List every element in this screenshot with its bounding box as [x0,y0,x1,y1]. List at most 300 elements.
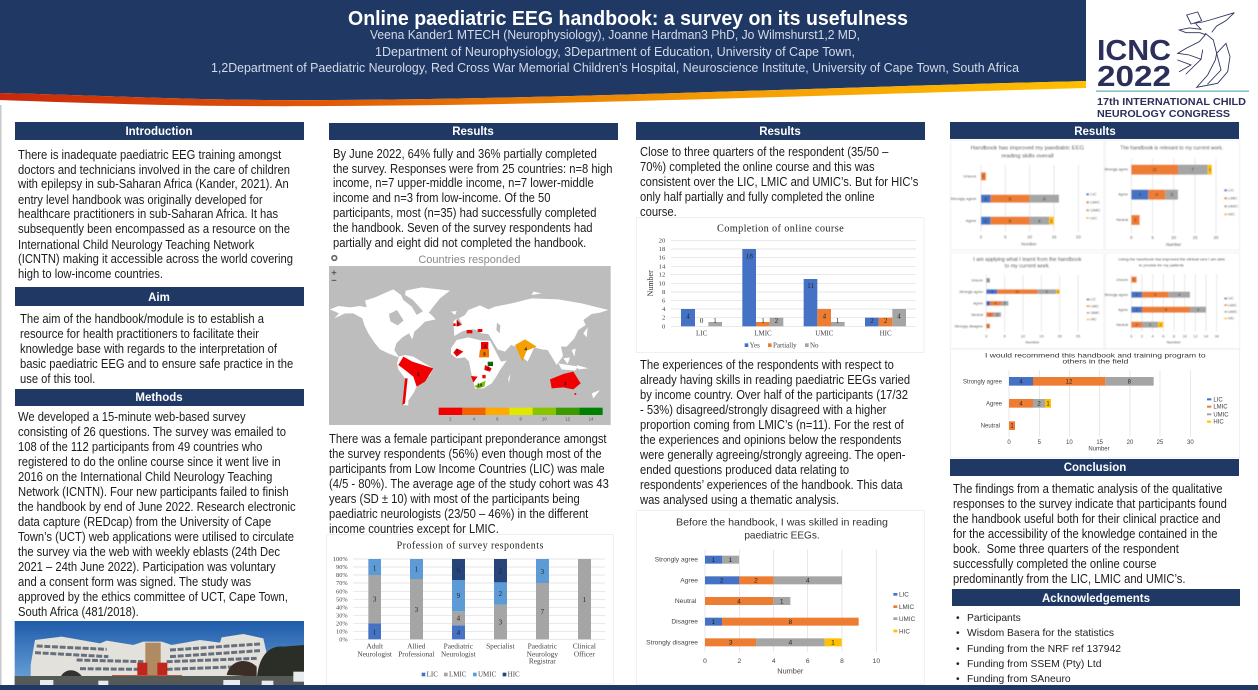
text: conclusion body: for the accessibility of the knowledge contained in the [953,526,1218,541]
chart: applying what was learnt: 2 [1004,302,1006,306]
heading: introduction: Introduction [125,126,193,138]
chart: applying what was learnt: Strongly disagree [955,324,983,328]
chart: applying what was learnt: 10 [1021,333,1026,338]
text: introduction body: with epilepsy in sub-Saharan Africa (Kander, 2021). An [17,176,289,191]
chart: applying what was learnt: Agree [973,302,983,306]
stacked bars [705,556,859,646]
legend: LMIC [899,604,915,611]
chart: applying what was learnt: 20 [1057,333,1063,338]
heading: results [329,123,618,140]
authors and affiliations: 1,2Department of Paediatric Neurology, Red Cross War Memorial Children’s Hospital, Neuroscience Institute, University of Cape Town, South Africa [211,61,1019,75]
logo: ICNC 2022: 2022 [1097,61,1171,93]
chart: improved reading skills: 2 [984,196,987,201]
chart: skilled before the handbook: Agree [680,577,698,584]
chart: improved clinical care: LIC [1228,297,1234,301]
chart: profession of survey respondents: 90% [336,564,348,571]
list: acknowledgements: • [956,628,960,639]
chart: applying what was learnt: 5 [1046,290,1048,294]
chart: skilled before the handbook: 8 [840,658,844,665]
text: prior skills and thematic analysis: respondents’ experiences of the handbook. This data [640,477,903,492]
text: methods body: the handbook by end of June 2022. Research electronic [18,499,296,514]
text: results overview: partially and eight did not completed the handbook. [333,235,586,250]
text: results overview: participants, most (n=35) had successfully completed [333,205,597,220]
chart title: Before the handbook, I was skilled in reading [676,517,888,528]
text: prior skills and thematic analysis: was analysed using a thematic analysis. [639,492,839,507]
logo: ICNC 2022 [1096,12,1249,120]
stacked bars [368,559,591,639]
text: prior skills and thematic analysis: The experiences of the respondents with respect to [640,357,894,372]
chart: improved clinical care: UMIC [1228,310,1238,314]
chart: skilled before the handbook: 3 [729,640,733,647]
chart: recommend to others: Neutral [981,424,1000,430]
chart: improved reading skills: 8 [1009,196,1012,201]
chart: improved clinical care: Number [1167,340,1181,345]
chart: applying what was learnt: 1 [987,324,989,328]
chart: skilled before the handbook: 1 [780,598,784,605]
heading: conclusion: Conclusion [1064,462,1126,474]
title: Online paediatric EEG handbook: a survey on its usefulness [348,8,908,30]
map legend: 6 [496,416,499,421]
chart: completion of online course: 11 [807,282,815,290]
legend: Yes [750,341,760,349]
text: course completion: course. [640,204,677,219]
chart: improved clinical care: 12 [1193,333,1198,338]
panel: conclusion [950,459,1239,586]
chart: applying what was learnt: Number [1025,340,1040,345]
chart: applying what was learnt: 15 [1039,333,1044,338]
chart: relevant to current work: 15 [1193,235,1198,240]
y axis label: Number [646,270,655,296]
map values: 3 [483,352,486,357]
panel: aim [15,287,304,386]
list: acknowledgements: • [956,674,960,685]
chart: completion of online course: HIC [880,330,892,338]
chart: relevant to current work: LIC [1228,188,1234,193]
chart: improved clinical care: Unsure [1116,278,1128,282]
chart: profession of survey respondents: Paediatric [444,642,474,651]
chart: relevant to current work: 10 [1171,235,1177,240]
legend: No [810,341,819,349]
chart: relevant to current work: 2 [1134,217,1137,222]
chart: improved clinical care: 4 [1152,333,1155,338]
text: introduction body: (ICNTN) making it accessible across the world covering [18,251,293,266]
chart: improved clinical care: Agree [1118,308,1128,312]
chart: recommend to others: LMIC [1213,405,1228,411]
chart: applying what was learnt: 5 [1004,333,1007,338]
chart: completion of online course [636,218,924,353]
chart: profession of survey respondents: 3 [541,568,545,576]
chart: profession of survey respondents: Neurologist [357,649,392,658]
chart: applying what was learnt: I am applying what I learnt from the handbook [973,257,1082,263]
chart: recommend to others: UMIC [1213,412,1229,418]
chart: profession of survey respondents [326,535,613,684]
chart: applying what was learnt: LIC [1090,298,1096,302]
legend: HIC [508,671,520,679]
panel: introduction [15,122,304,281]
chart: profession of survey respondents: 100% [333,556,348,563]
heading: results [950,122,1239,139]
text: methods body: South Africa (481/2018). [18,604,139,619]
chart: recommend to others: 2 [1037,401,1041,407]
chart: recommend to others: 4 [1019,379,1023,385]
legend: Partially [773,341,797,349]
chart: profession of survey respondents: Neurologist [441,649,476,658]
list: acknowledgements [956,613,1121,685]
chart: profession of survey respondents: 20% [336,620,348,627]
chart: skilled before the handbook: 2 [754,578,758,585]
text: introduction body: doctors and technicians involved in the care of children [18,162,290,177]
chart: improved reading skills: Handbook has improved my paediatric EEG [971,145,1084,151]
chart: skilled before the handbook: Neutral [675,598,697,605]
chart: skilled before the handbook: 2 [737,658,741,665]
chart: improved reading skills: 1 [1050,218,1053,223]
chart: improved reading skills: 4 [1038,218,1041,223]
text: methods body: Town’s (UCT) web applications were utilised to circulate [18,529,294,544]
chart: completion of online course: LIC [696,330,708,338]
chart: profession of survey respondents: Officer [574,649,595,658]
chart: skilled before the handbook: 4 [772,658,776,665]
text: introduction body: high to low-income countries. [18,266,163,281]
text: course completion: consistent over the LIC, LMIC and UMIC’s. But for HIC’s [640,174,918,189]
chart: relevant to current work: 1 [1209,167,1212,172]
chart: applying what was learnt: 25 [1076,333,1081,338]
chart: profession of survey respondents: 1 [373,564,377,572]
legend: LIC [427,671,438,679]
chart: recommend to others: Number [1088,446,1110,452]
chart: completion of online course: 6 [662,298,666,305]
chart: improved clinical care: 10 [1182,333,1188,338]
chart: completion of online course: 0 [662,323,666,330]
chart: improved clinical care: 2 [1136,308,1138,312]
chart: recommend to others: HIC [1213,420,1224,426]
chart: improved clinical care: LMIC [1228,303,1237,307]
chart: improved reading skills: LIC [1090,192,1097,197]
chart: improved reading skills: UMIC [1090,208,1101,213]
heading: aim [15,287,304,306]
legend [745,341,819,349]
chart: completion of online course: 8 [662,289,666,296]
map legend [439,408,603,421]
map legend: 4 [473,416,476,421]
chart: improved clinical care [1104,253,1240,349]
chart: profession of survey respondents: Neurology [527,649,558,658]
text: methods body: Network (ICNTN). Four new participants failed to finish [18,484,289,499]
chart: applying what was learnt: Strongly agree [959,290,983,294]
text: conclusion body: book. Some three quarters of the respondent [953,541,1180,556]
text: course completion: Close to three quarters of the respondent (35/50 – [640,144,889,159]
map: countries responded [329,254,611,425]
chart: recommend to others: Agree [986,401,1003,407]
chart: profession of survey respondents: Paediatric [528,642,558,651]
heading: acknowledgements: Acknowledgements [1042,593,1150,605]
list: acknowledgements: Participants [967,613,1021,624]
chart: applying what was learnt: 2 [989,313,991,317]
map values: 2 [487,365,490,370]
logo: ICNC 2022: ICNC [1097,35,1171,67]
chart: relevant to current work: 4 [1138,192,1141,197]
chart: improved reading skills: 2 [984,218,987,223]
heading: results: Results [452,126,494,138]
chart: recommend to others: 15 [1096,440,1104,446]
chart: profession of survey respondents: 2 [499,567,503,575]
text: prior skills and thematic analysis [639,357,910,507]
chart: recommend to others: 0 [1007,440,1011,446]
map legend: 12 [565,416,571,421]
panel: results column 2 [326,123,618,684]
panel: acknowledgements [952,589,1240,685]
chart: improved reading skills: Number [1021,242,1037,247]
highlighted countries [398,319,581,405]
chart: relevant to current work: LMIC [1228,196,1238,201]
chart: relevant to current work: 5 [1151,235,1154,240]
chart: improved clinical care: 2 [1136,293,1138,297]
chart: improved reading skills: 6 [1043,196,1046,201]
logo: ICNC 2022: NEUROLOGY CONGRESS [1097,109,1230,120]
map values: 2 [456,321,459,326]
chart: improved clinical care: 3 [1197,308,1199,312]
chart: relevant to current work: 7 [1191,167,1194,172]
text: methods body: registered to do the online course since it went live in [18,454,281,469]
chart: profession of survey respondents: Clinical [573,642,596,651]
list: acknowledgements: Funding from SSEM (Pty) Ltd [967,659,1102,670]
heading: results: Results [1074,126,1116,138]
chart: completion of online course: 1 [836,317,840,325]
chart: completion of online course: 4 [823,312,827,320]
chart: improved reading skills: LMIC [1090,200,1100,205]
chart: completion of online course: 2 [884,317,888,325]
chart: improved clinical care: 9 [1165,308,1167,312]
heading: acknowledgements [952,589,1240,606]
chart: improved reading skills: 8 [1009,218,1012,223]
text: introduction body: International Child Neurology Teaching Network [18,237,254,252]
chart: improved reading skills: Unsure [963,174,977,179]
chart: relevant to current work: Neutral [1116,218,1128,222]
chart: recommend to others: 1 [1046,401,1050,407]
text: prior skills and thematic analysis: the experiences and opinions below the respondents [640,432,901,447]
chart: completion of online course: 18 [659,246,666,253]
chart: improved clinical care: 16 [1214,333,1220,338]
list: acknowledgements: Funding from the NRF ref 137942 [967,644,1121,655]
chart: improved reading skills: HIC [1090,215,1097,220]
chart: completion of online course: 2 [662,315,665,322]
chart: relevant to current work: 3 [1170,192,1173,197]
chart title: Profession of survey respondents [397,540,543,551]
chart: profession of survey respondents: 1 [415,566,419,574]
chart: profession of survey respondents: 6 [457,566,461,574]
chart: profession of survey respondents: 2 [499,590,503,598]
text: respondent demographics: There was a female participant preponderance amongst [329,431,607,446]
chart: skilled before the handbook: 8 [788,619,792,626]
chart: recommend to others: 8 [1128,379,1132,385]
text: methods body [18,409,296,619]
chart: improved clinical care: Strongly agree [1104,293,1128,297]
chart: improved reading skills: 20 [1076,234,1081,239]
legend [893,592,916,635]
text: introduction body: entry level handbook was originally developed for [18,192,263,207]
panel: results column 4 [950,122,1240,458]
chart: completion of online course: 20 [659,237,666,244]
chart: improved clinical care: 1 [1160,323,1162,327]
text: conclusion body: The findings from a thematic analysis of the qualitative [953,481,1223,496]
chart: profession of survey respondents: 10% [336,628,348,635]
text: course completion: 70%) completed the online course and this was [640,159,875,174]
chart: skilled before the handbook: Strongly disagree [646,639,698,646]
chart: improved clinical care: 0 [1130,333,1133,338]
text: course completion [640,144,918,219]
icon: settings gear [332,256,337,260]
text: conclusion body: the handbook useful both for their clinical practice and [953,511,1221,526]
text: conclusion body [953,481,1227,586]
chart: profession of survey respondents: 0% [339,636,348,643]
chart: skilled before the handbook [637,511,924,684]
chart: applying what was learnt: 3 [994,302,996,306]
chart title [676,517,888,541]
text: results overview: income, n=7 upper-middle income, n=7 lower-middle [333,175,594,190]
chart title: Completion of online course [717,223,844,234]
chart: improved clinical care: 8 [1173,333,1176,338]
text: results overview [333,146,612,250]
text: results overview: the handbook. Seven of the survey respondents had [333,220,593,235]
chart: skilled before the handbook: Strongly agree [655,557,698,564]
authors and affiliations: Veena Kander1 MTECH (Neurophysiology), Joanne Hardman3 PhD, Jo Wilmshurst1,2 MD, [370,28,860,42]
text: methods body: 2021 – 24th June 2022). Participation was voluntary [18,559,276,574]
map legend: 14 [589,416,594,421]
chart: improved reading skills: Strongly agree [950,196,977,201]
chart: applying what was learnt: 2 [996,313,998,317]
chart: completion of online course: 4 [662,306,666,313]
chart: profession of survey respondents: Specialist [486,642,515,651]
heading: results [636,122,925,140]
chart: improved clinical care: to provide for my patients [1139,262,1184,267]
chart: profession of survey respondents: 3 [499,619,503,627]
text: aim body: knowledge base with regards to the interpretation of [20,341,278,356]
chart: profession of survey respondents: Allied [407,642,426,651]
authors and affiliations [211,28,1019,75]
text: methods body: data capture (REDcap) from the University of Cape [18,514,272,529]
chart: completion of online course: 16 [659,255,666,262]
chart: profession of survey respondents: 3 [373,596,377,604]
chart: improved clinical care: 6 [1162,333,1165,338]
chart: completion of online course: 4 [686,312,690,320]
chart: skilled before the handbook: 4 [737,598,741,605]
chart: relevant to current work: HIC [1228,212,1235,217]
chart: improved clinical care: Neutral [1116,323,1128,327]
chart: applying what was learnt: 1 [1057,290,1059,294]
text: aim body: The aim of the handbook/module is to establish a [20,311,264,326]
chart: completion of online course: 14 [659,263,666,270]
heading: results: Results [759,126,801,138]
panel: results column 3 [636,122,925,684]
chart: applying what was learnt: Unsure [971,279,983,283]
legend [422,671,520,679]
chart: skilled before the handbook: 4 [788,640,792,647]
footer bar [0,685,1258,690]
legend: HIC [899,628,910,635]
chart: skilled before the handbook: 4 [806,578,810,585]
text: conclusion body: predominantly from the LIC, LMIC and UMIC’s. [953,571,1185,586]
text: respondent demographics: years (SD ± 10) with most of the participants being [329,491,580,506]
chart: completion of online course: 2 [870,317,874,325]
text: course completion: only half partially and fully completed the online [640,189,875,204]
text: prior skills and thematic analysis: were generally agreeing/strongly agreeing. The open- [639,447,906,462]
chart: relevant to current work: 11 [1152,167,1158,172]
text: results overview: income and n=3 from low-income. Of the 50 [333,190,551,205]
chart: skilled before the handbook: 0 [703,658,707,665]
text: conclusion body: responses to the survey indicate that participants found [953,496,1227,511]
heading: introduction [15,122,304,140]
chart: improved clinical care: Using the handbook has improved the clinical care I am able [1118,257,1226,262]
text: prior skills and thematic analysis: - 53%) disagreed/strongly disagreed with a higher [640,402,886,417]
text: methods body: the survey via the web with weekly eblasts (24th Dec [18,544,280,559]
chart: skilled before the handbook: Number [777,667,804,676]
chart: recommend to others: 12 [1066,379,1073,385]
map title: Countries responded [418,254,520,266]
chart: applying what was learnt: LMIC [1090,304,1099,308]
text: prior skills and thematic analysis: already having skills in reading paediatric EEGs varied [640,372,910,387]
left page edge [0,105,2,685]
legend: LIC [899,592,909,599]
chart: completion of online course: 10 [659,280,666,287]
heading: aim: Aim [148,292,170,304]
text: prior skills and thematic analysis: proportion coming from LMIC’s (n=11). For the rest of [640,417,904,432]
text: respondent demographics: (4/5 - 80%). The average age of the study cohort was 43 [329,476,609,491]
text: introduction body: subsequently been encompassed as a resource on the [18,221,290,236]
list: acknowledgements: Wisdom Basera for the statistics [967,628,1114,639]
chart: profession of survey respondents: 9 [457,592,461,600]
text: introduction body [17,147,293,281]
chart: improved clinical care: 5 [1154,293,1156,297]
text: introduction body: healthcare practitioners in sub-Saharan Africa. It has [18,206,278,221]
chart: improved reading skills: 5 [1004,234,1007,239]
map legend: 10 [542,416,547,421]
chart: recommend to others: 5 [1038,440,1042,446]
list: acknowledgements: • [956,613,960,624]
chart: profession of survey respondents: 50% [336,596,348,603]
text: methods body: We developed a 15-minute web-based survey [18,409,246,424]
map values [417,321,567,388]
text: methods body: approved by the ethics committee of UCT, Cape Town, [18,589,288,604]
heading: methods [15,389,304,406]
heading: conclusion [950,459,1239,476]
chart: completion of online course: 1 [713,317,717,325]
chart: applying what was learnt: 1 [987,279,989,283]
chart: applying what was learnt: UMIC [1090,311,1100,315]
chart: completion of online course: 2 [775,317,779,325]
chart: recommend to others: 25 [1157,440,1164,446]
list: acknowledgements: Funding from SAneuro [967,674,1071,685]
chart: relevant to current work: Agree [1118,193,1128,197]
chart: completion of online course: 4 [897,312,901,320]
chart: relevant to current work: 4 [1155,192,1158,197]
text: aim body: use of this tool. [20,371,95,386]
chart: recommend to others: others in the field [1062,360,1128,366]
chart: profession of survey respondents: 70% [336,580,348,587]
chart: recommend to others: 30 [1187,440,1194,446]
chart: applying what was learnt: 11 [1015,290,1019,294]
map values: 1 [484,343,487,348]
chart: improved clinical care: 14 [1204,333,1209,338]
chart: profession of survey respondents: 80% [336,572,348,579]
text: methods body: and a consent form was signed. The study was [18,574,251,589]
chart: skilled before the handbook: 6 [806,658,810,665]
continents [330,287,608,405]
text: introduction body: There is inadequate paediatric EEG training amongst [18,147,282,162]
chart: completion of online course: UMIC [815,330,834,338]
chart: improved reading skills: 15 [1052,234,1057,239]
chart: profession of survey respondents: 4 [457,615,461,623]
chart: applying what was learnt: 1 [987,302,989,306]
chart: profession of survey respondents: 7 [541,608,545,616]
